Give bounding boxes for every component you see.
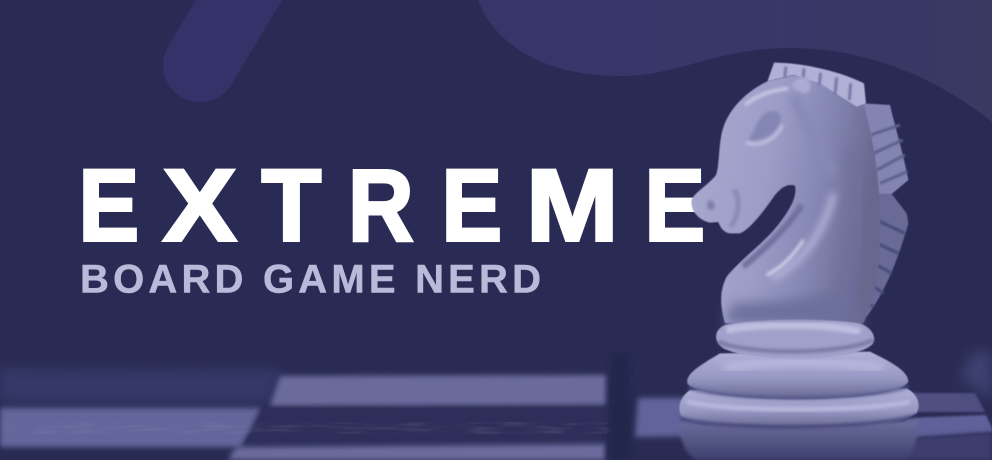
knight ear [792,78,811,94]
knight base lower ring [679,388,919,428]
icon: chess knight [678,63,919,460]
title: extreme: E [78,150,139,263]
knight shading [707,88,863,323]
decorative top right blob [478,0,992,122]
decorative pill shape [200,0,272,65]
title: extreme: X [163,149,236,263]
title: extreme: T [262,149,321,263]
base highlights [681,325,917,427]
title: extreme: E [644,150,705,263]
knight head and neck [691,75,880,323]
knight rear mane lower [840,193,908,317]
subtitle: board game nerd: BOARD GAME NERD [80,258,541,302]
knight reflection [678,420,918,460]
knight base middle ring [687,352,908,399]
title: extreme: R [348,150,414,263]
title: extreme [78,148,705,263]
knight crest [767,63,866,107]
title: extreme: M [526,148,619,262]
knight base top ring [716,320,874,358]
knight rear mane upper [860,103,908,200]
title: extreme: E [442,150,502,263]
chess board [0,352,992,460]
